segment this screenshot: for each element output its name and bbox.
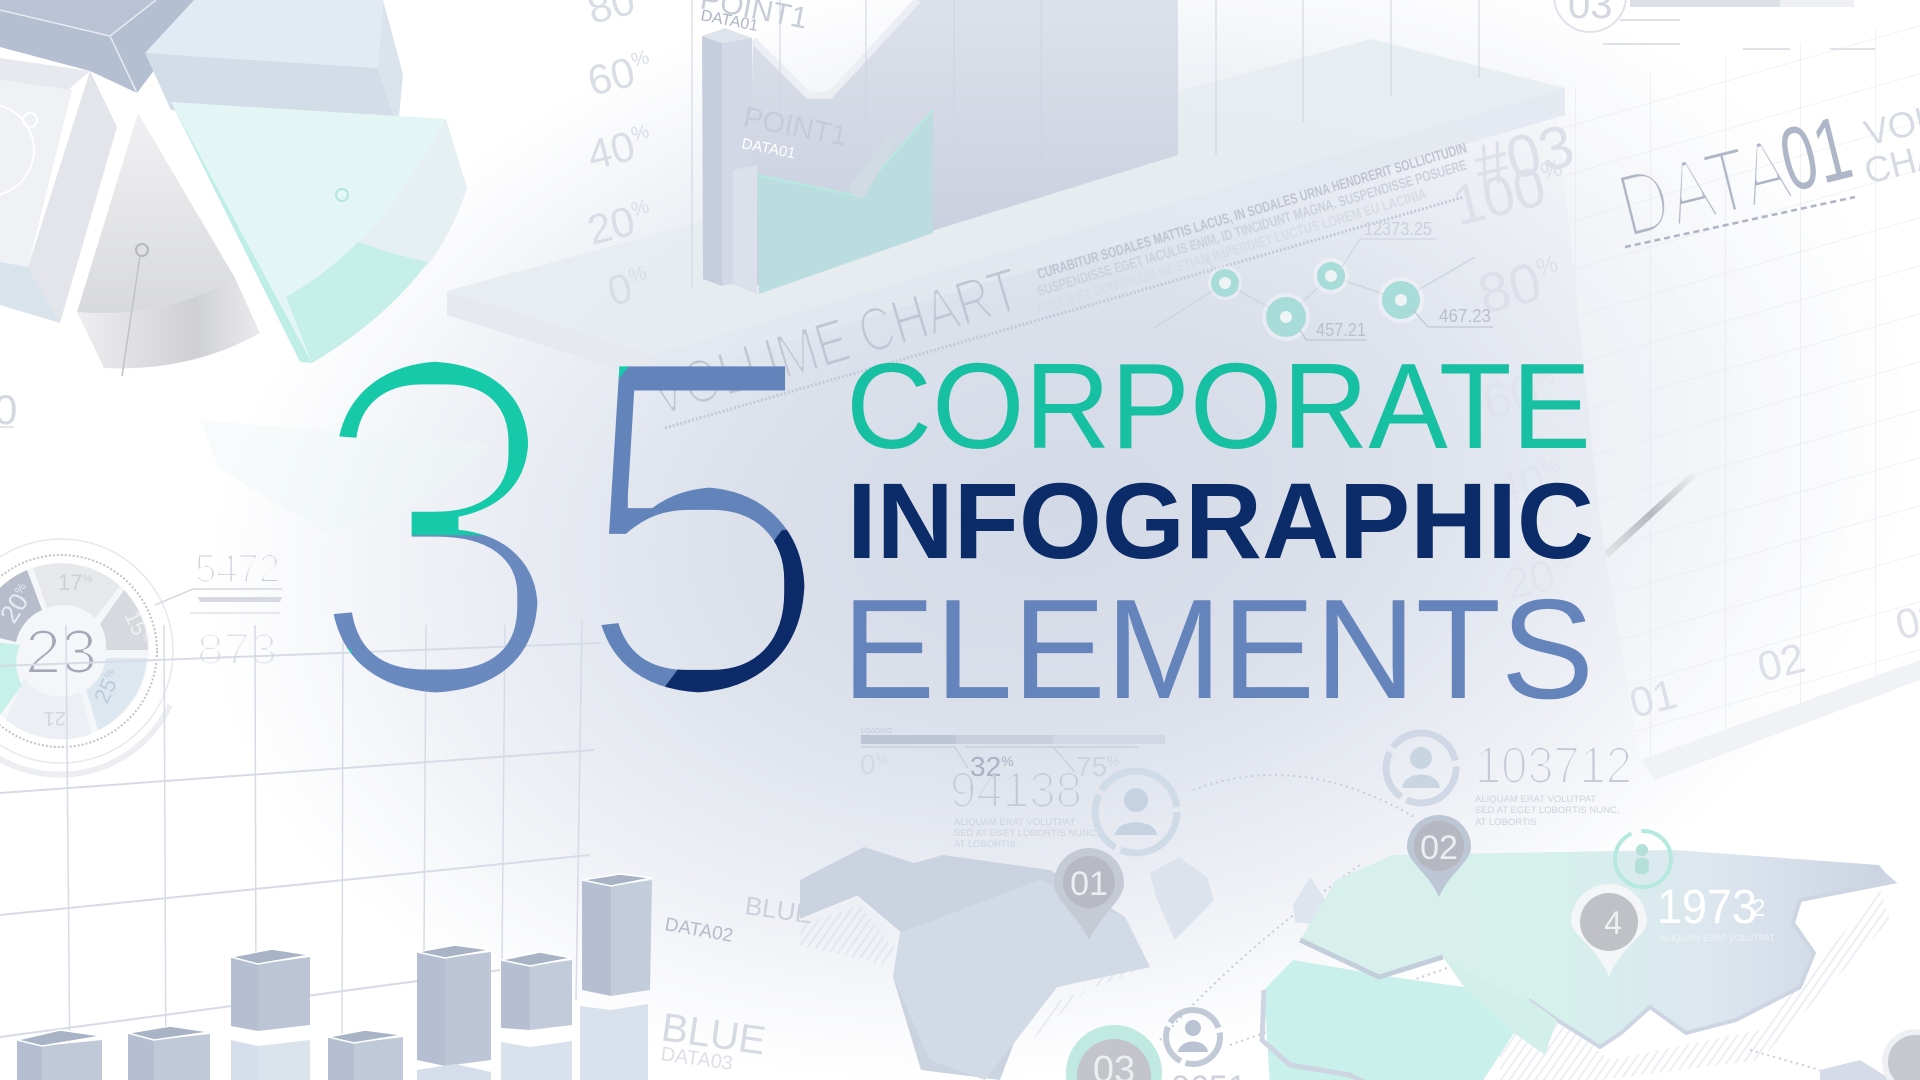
- bar chart labels: [659, 890, 815, 1075]
- 3D bar chart: [17, 874, 652, 1080]
- Africa side edge: [1262, 990, 1370, 1080]
- bottom left grid: [0, 620, 600, 1080]
- volume chart caption: [643, 197, 1464, 429]
- DATA01 heading: DATA: [1609, 119, 1800, 257]
- point labels: DATA01: [740, 135, 797, 162]
- British Isles: [1293, 877, 1329, 925]
- value 457.21: 457.21: [1316, 320, 1366, 340]
- loading progress bar: 75: [1076, 751, 1107, 782]
- segment teal: [0, 640, 22, 715]
- grey stick: [1604, 472, 1697, 558]
- bar 4: [328, 1030, 403, 1080]
- right perspective grid panel: [1555, 18, 1920, 780]
- user ring lower: [1166, 1010, 1220, 1064]
- right axis labels: [1446, 111, 1580, 610]
- loading progress bar: %: [876, 751, 888, 767]
- pie slice: pale blue: [145, 0, 403, 128]
- bar 3: [231, 949, 310, 1031]
- top right badge 03: [1554, 0, 1875, 49]
- line chart with teal nodes: [1154, 219, 1493, 341]
- axis labels: 0: [603, 263, 637, 315]
- user ring 103712: [1386, 733, 1456, 803]
- left column: [702, 28, 752, 286]
- map pin 02: 02: [1420, 829, 1458, 867]
- right axis labels: %: [1532, 363, 1557, 392]
- point labels: [698, 0, 850, 162]
- 3D exploded pie chart: [0, 0, 467, 376]
- right axis labels: #03: [1467, 111, 1580, 201]
- node: [1262, 293, 1310, 341]
- dotted connectors: [1160, 775, 1820, 1070]
- value 467.23: 467.23: [1439, 306, 1491, 326]
- loading progress bar: LOADING: [861, 728, 893, 735]
- map pin 4: 4: [1604, 905, 1622, 941]
- axis labels: %: [629, 46, 652, 72]
- segment 20 percent: %: [12, 580, 29, 597]
- pie slice: grey: [77, 113, 260, 376]
- bar chart labels: BLUE: [659, 1005, 768, 1063]
- teal area: [757, 110, 933, 294]
- Eurasia side edge: [1529, 870, 1893, 1047]
- pie slice: white panel: [0, 58, 117, 323]
- grey area surface: [747, 0, 1178, 288]
- statistic 94138: SED AT EGET LOBORTIS NUNC,: [954, 828, 1098, 839]
- bar 5: [417, 945, 491, 1080]
- right axis labels: %: [1534, 250, 1561, 281]
- axis labels: %: [626, 262, 649, 288]
- pie slice: slate: [0, 0, 207, 93]
- Mediterranean coast: [1300, 940, 1443, 977]
- headline number 3: 3: [301, 255, 571, 797]
- right axis labels: %: [1539, 455, 1562, 481]
- bar chart labels: BLUE: [743, 890, 815, 929]
- bar 6: [501, 952, 572, 1080]
- loading progress bar: [860, 728, 1165, 782]
- right axis labels: 60: [1477, 363, 1545, 431]
- map hatch shadow: [800, 890, 1890, 1080]
- Southeast Asia fragment: [1820, 1060, 1900, 1080]
- bar chart labels: DATA03: [659, 1043, 734, 1075]
- statistic 94138: ALIQUAM ERAT VOLUTPAT: [954, 817, 1075, 828]
- right axis labels: %: [1549, 550, 1572, 576]
- map pin 4: [1571, 884, 1647, 977]
- segment 25 percent: %: [102, 667, 117, 681]
- faint ghost triangles: [0, 386, 490, 535]
- side values 5472 and 873: 5472: [195, 547, 280, 591]
- statistic 19732: 2: [1752, 895, 1765, 922]
- user ring teal: [1615, 831, 1671, 887]
- axis labels: 20: [583, 197, 640, 254]
- axis labels: 60: [583, 48, 640, 105]
- grid axis numbers: [1625, 592, 1920, 727]
- grey short column: [733, 165, 757, 294]
- point labels: DATA01: [699, 7, 760, 35]
- node: [1378, 277, 1424, 323]
- world map: [800, 847, 1900, 1080]
- top centre 3D area chart: [447, 0, 1565, 380]
- segment 15 percent: [100, 590, 157, 650]
- segment 17 percent: %: [82, 573, 92, 585]
- title: corporate: CORPORATE: [846, 338, 1591, 474]
- loading progress bar: %: [1001, 753, 1014, 769]
- segment 21 percent: 21: [44, 707, 66, 729]
- segment 21 percent: [6, 678, 92, 740]
- circular donut gauge: [0, 539, 173, 775]
- value 12373.25: [1340, 219, 1436, 270]
- DATA01 heading: 01: [1771, 98, 1861, 211]
- statistic 19732: 1973: [1657, 881, 1757, 934]
- centre value: 23: [25, 618, 97, 687]
- loading progress bar: 0: [860, 749, 876, 780]
- side values 5472 and 873: [155, 547, 282, 674]
- statistic 103712: SED AT EGET LOBORTIS NUNC,: [1475, 805, 1619, 816]
- caption body text: SUSPENDISSE EGET IACULIS ENIM, ID TINCIDUNT MAGNA. SUSPENDISSE POSUERE: [1036, 157, 1469, 300]
- axis labels: 40: [583, 122, 640, 179]
- segment 25 percent: 25: [89, 674, 122, 707]
- map pin 03: [1066, 1025, 1162, 1080]
- right axis labels: 40: [1491, 455, 1550, 515]
- map pin 01: [1054, 848, 1124, 940]
- title: infographic: INFOGRAPHIC: [847, 460, 1594, 581]
- statistic 103712: ALIQUAM ERAT VOLUTPAT: [1475, 794, 1596, 805]
- title: elements: ELEMENTS: [842, 570, 1594, 729]
- map pin 01: 01: [1070, 865, 1108, 903]
- Eurasia: [1300, 850, 1893, 1047]
- bar chart labels: DATA02: [663, 914, 735, 947]
- node: [1208, 266, 1242, 300]
- value 467.23: [1413, 306, 1493, 327]
- right axis labels: 80: [1472, 249, 1547, 326]
- pie slice: teal: [171, 102, 467, 363]
- right axis labels: 20: [1501, 550, 1560, 610]
- vertical guide lines: [692, 0, 1479, 287]
- axis labels: %: [629, 120, 652, 146]
- loading progress bar: %: [1107, 753, 1120, 769]
- grid axis numbers: 01: [1625, 670, 1682, 727]
- chart platform: [447, 39, 1565, 380]
- bar 7: [580, 874, 652, 1080]
- headline number 5: 5: [567, 255, 837, 797]
- caption body text: CURABITUR SODALES MATTIS LACUS, IN SODALES URNA HENDRERIT SOLLICITUDIN: [1036, 141, 1469, 283]
- Arabia: [1443, 957, 1557, 1055]
- node: [1313, 258, 1349, 294]
- volume chart caption: VOLUME CHART: [643, 255, 1027, 429]
- loading progress bar: 32: [970, 751, 1001, 782]
- area top edge: [753, 0, 918, 95]
- map pin 02: [1407, 815, 1471, 897]
- bar 3 lower: [231, 1040, 310, 1080]
- caption body text: NULLA ET CONVALLIS MI. ETIAM IMPERDIET LUCTUS LOREM EU LACINIA: [1036, 186, 1429, 317]
- bar 2: [128, 1026, 210, 1080]
- grid axis numbers: 02: [1753, 634, 1810, 691]
- user ring 94138: [1095, 771, 1177, 853]
- segment 15 percent: %: [139, 630, 154, 644]
- statistic 94138: 94138: [950, 762, 1082, 818]
- axis labels: %: [629, 195, 652, 221]
- segment 20 percent: [0, 570, 42, 642]
- North America coast: [800, 897, 900, 933]
- right axis labels: 100: [1446, 154, 1552, 238]
- value 12373.25: 12373.25: [1364, 219, 1432, 239]
- segment 15 percent: 15: [119, 607, 152, 639]
- Greenland: [1150, 857, 1214, 940]
- bar 1: [17, 1030, 102, 1080]
- segment 17 percent: 17: [58, 570, 82, 595]
- statistic 19732: ALIQUAM ERAT VOLUTPAT: [1660, 933, 1775, 943]
- side values 5472 and 873: 873: [197, 625, 277, 674]
- statistic 94138: [950, 762, 1098, 850]
- statistic 94138: AT LOBORTIS: [954, 839, 1016, 850]
- Africa: [1264, 960, 1514, 1080]
- North America surface: [893, 880, 1150, 1080]
- corner pin: [1885, 1032, 1920, 1080]
- statistic 103712: [1475, 737, 1632, 828]
- statistic 103712: 103712: [1475, 737, 1632, 795]
- segment 17 percent: [33, 563, 120, 618]
- point labels: POINT1: [741, 101, 850, 153]
- statistic 103712: AT LOBORTIS: [1475, 817, 1537, 828]
- axis labels: [583, 0, 657, 315]
- right axis labels: %: [1538, 155, 1565, 186]
- North America: [800, 847, 1150, 1080]
- segment 25 percent: [86, 658, 147, 730]
